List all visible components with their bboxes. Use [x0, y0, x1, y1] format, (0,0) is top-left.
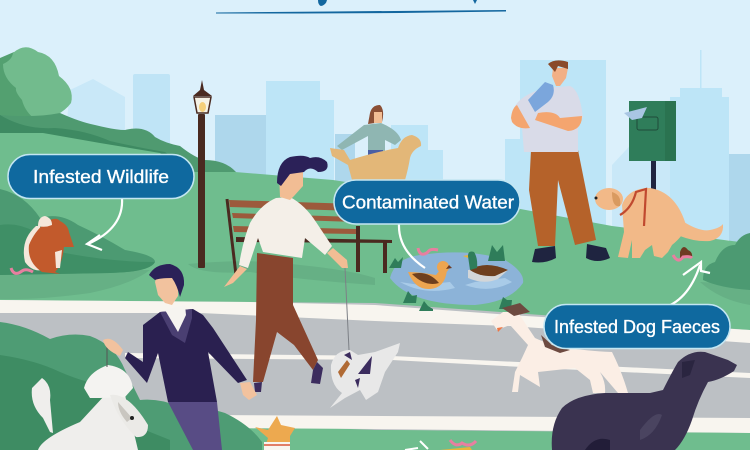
left bush	[0, 189, 155, 275]
bottom right worm and arrow	[405, 440, 476, 450]
right shrub	[703, 233, 750, 290]
poop bag dispenser	[624, 101, 676, 190]
label: Infested Dog Faeces	[544, 304, 730, 348]
infested dog faeces	[673, 247, 692, 260]
bottom lawn	[0, 428, 750, 450]
black dog	[552, 352, 737, 450]
pond worm	[418, 248, 438, 254]
label: Infested Dog Faeces: Infested Dog Faeces	[554, 317, 720, 337]
golden dog	[594, 188, 723, 258]
man holding glove	[511, 60, 610, 263]
woman with golden retriever	[330, 105, 421, 180]
corgi	[255, 416, 295, 450]
label: Infested Wildlife: Infested Wildlife	[33, 167, 169, 187]
label: Contaminated Water: Contaminated Water	[342, 192, 514, 212]
woman walking with dog	[224, 156, 349, 392]
squirrel with worm	[11, 216, 74, 274]
label: Infested Wildlife	[8, 154, 194, 198]
grass tufts	[389, 245, 512, 311]
ducks	[400, 252, 512, 291]
label arrow: water	[399, 224, 425, 268]
title underline	[216, 0, 506, 14]
running dog	[491, 303, 628, 393]
park lawn	[0, 133, 750, 450]
lamp post	[193, 80, 212, 268]
label arrow: faeces	[660, 262, 710, 309]
city skyline	[65, 50, 750, 244]
bench	[227, 199, 392, 275]
tuxedo man	[103, 264, 257, 450]
lawn shadows	[0, 261, 750, 305]
label: Contaminated Water	[334, 180, 520, 224]
hills behind the park	[0, 113, 236, 180]
pond	[390, 252, 523, 305]
bottom left hill	[0, 322, 262, 450]
poodle	[32, 345, 148, 450]
tree	[0, 47, 72, 150]
label arrow: wildlife	[87, 198, 122, 250]
road	[0, 300, 750, 433]
dalmatian	[330, 343, 400, 408]
